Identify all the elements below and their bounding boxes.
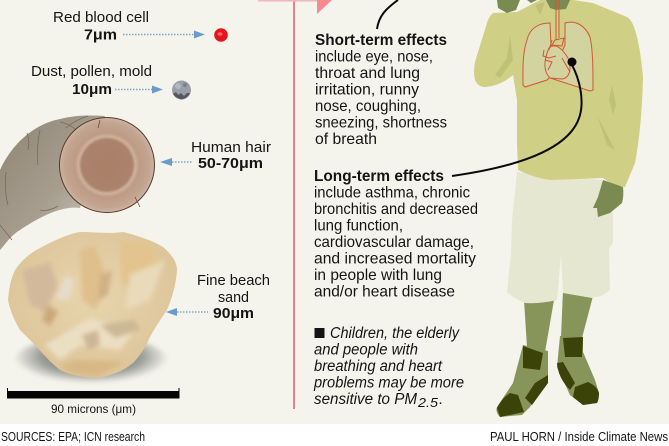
text: long-term effects: include asthma, chronic [314, 184, 470, 202]
pointer curve: long-term effects to lungs [452, 58, 582, 176]
text: short-term effects [315, 32, 447, 148]
icon: lungs and heart [523, 0, 593, 91]
size item: fine beach sand: 90μm [213, 305, 254, 322]
text: long-term effects: lung function, [314, 218, 403, 234]
text: short-term effects: irritation, runny [315, 82, 419, 98]
size item: human hair: 50-70μm [198, 155, 263, 172]
size item: red blood cell [53, 9, 228, 44]
text: short-term effects: include eye, nose, [315, 48, 433, 66]
text: short-term effects: throat and lung [315, 65, 420, 82]
text: short-term effects: nose, coughing, [315, 98, 421, 115]
size item: red blood cell: 7μm [84, 26, 117, 44]
text: long-term effects: and/or heart disease [314, 284, 455, 300]
size item: dust, pollen, mold: 10μm [72, 81, 112, 98]
size item: fine beach sand: Fine beach [197, 272, 270, 289]
text: long-term effects: cardiovascular damage, [314, 234, 474, 251]
text: short-term effects: sneezing, shortness [315, 114, 447, 132]
size item: human hair [0, 115, 271, 250]
scale bar [7, 388, 180, 416]
illustration: person [474, 0, 643, 417]
text: long-term effects: Long-term effects [314, 168, 444, 185]
size item: dust, pollen, mold [31, 63, 191, 100]
text: long-term effects: in people with lung [314, 267, 442, 284]
size item: fine beach sand [8, 232, 270, 389]
right shoe [557, 336, 599, 405]
icon: sand grain [8, 232, 177, 389]
text: long-term effects: and increased mortality [314, 250, 476, 268]
left shoe [496, 345, 548, 417]
source credit: SOURCES: EPA; ICN research [1, 430, 145, 444]
legs [524, 290, 593, 352]
hand at face [497, 0, 537, 13]
text: long-term effects: bronchitis and decreased [314, 201, 478, 218]
pointer curve: short-term effects [377, 0, 398, 29]
pink top callout pointer [258, 0, 332, 14]
text: sensitive groups note: and people with [314, 342, 418, 358]
hoodie [474, 0, 643, 187]
scale bar: 90 microns (μm) [51, 402, 136, 416]
text: short-term effects: of breath [315, 131, 377, 148]
text: sensitive groups note: problems may be more [313, 374, 464, 392]
text: sensitive groups note [313, 325, 464, 410]
neck [546, 0, 570, 10]
size item: fine beach sand: sand [218, 289, 249, 306]
text: long-term effects [314, 168, 478, 300]
pink divider line [293, 0, 295, 409]
size item: red blood cell: Red blood cell [53, 9, 149, 26]
size item: human hair: Human hair [191, 139, 271, 156]
text: sensitive groups note: breathing and heart [314, 358, 443, 375]
text: sensitive groups note: . [439, 391, 443, 408]
lower hand [593, 180, 623, 217]
text: sensitive groups note: Children, the elderly [330, 325, 460, 342]
text: sensitive groups note: 2.5 [417, 395, 439, 410]
icon: hair strand [0, 115, 154, 250]
text: sensitive groups note: sensitive to PM [314, 391, 417, 408]
size item: dust, pollen, mold: Dust, pollen, mold [31, 63, 152, 80]
shorts [507, 172, 613, 303]
text: short-term effects: Short-term effects [315, 32, 447, 49]
